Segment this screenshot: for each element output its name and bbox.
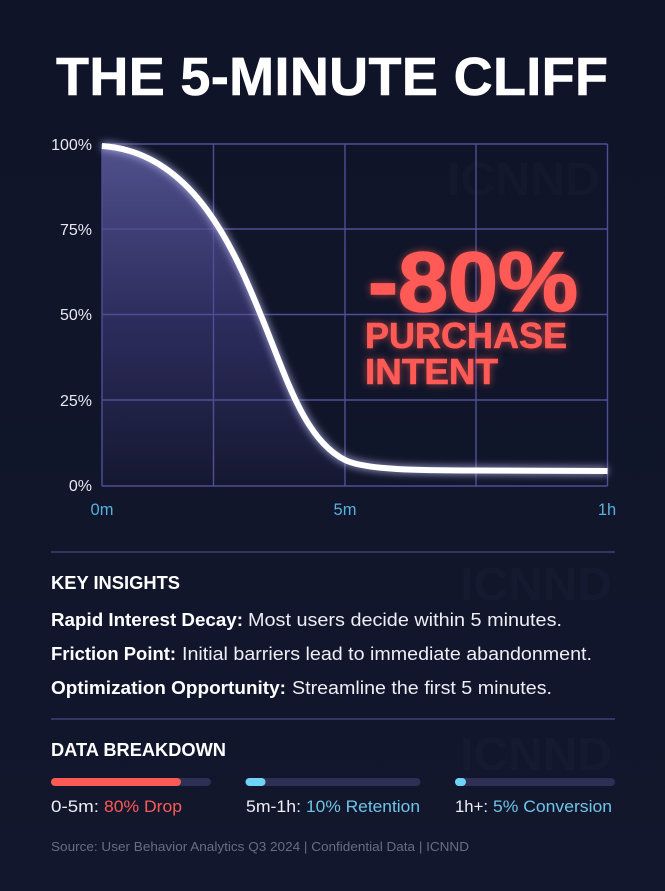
insight: rapid interest decay: [51, 610, 562, 630]
bar: 0-5m: 80% Drop: [104, 797, 182, 816]
watermark: insights: ICNND: [460, 558, 612, 610]
callout: -80% purchase intent: PURCHASE: [365, 315, 567, 356]
title: THE 5-MINUTE CLIFF: [56, 47, 608, 107]
x axis labels: 5m: [334, 501, 356, 519]
insight: optimization opportunity: [51, 678, 552, 698]
bar: 1h+: 5% Conversion: [493, 797, 612, 816]
watermark: chart: ICNND: [447, 153, 600, 205]
insight: rapid interest decay: Most users decide within 5 minutes.: [248, 610, 562, 630]
bar: 5m-1h: [246, 778, 420, 816]
insight: friction point: Initial barriers lead to immediate abandonment.: [182, 644, 592, 664]
callout: -80% purchase intent: INTENT: [365, 351, 498, 392]
insight: rapid interest decay: Rapid Interest Decay:: [51, 610, 243, 630]
y axis labels: 100%: [51, 137, 92, 154]
panel: data breakdown: [51, 740, 615, 816]
y axis labels: 50%: [60, 307, 92, 324]
bar: 1h+: 1h+:: [455, 797, 488, 816]
bar: 1h+: [455, 778, 615, 816]
curve line: [102, 146, 608, 471]
insight: friction point: Friction Point:: [51, 644, 176, 664]
callout: -80% purchase intent: [365, 235, 578, 392]
bar: 0-5m: 0-5m:: [51, 797, 99, 816]
x axis labels: 0m: [91, 501, 113, 519]
bar: 5m-1h: 5m-1h:: [246, 797, 301, 816]
callout: -80% purchase intent: -80%: [368, 235, 578, 329]
callout: -80% purchase intent: PURCHASE: [365, 315, 567, 356]
y axis labels: 25%: [60, 393, 92, 410]
callout: -80% purchase intent: -80%: [368, 235, 578, 329]
y axis labels: [51, 137, 92, 495]
chart: purchase intent decay: [51, 137, 616, 519]
area fill under curve: [102, 146, 345, 486]
watermark: data: ICNND: [460, 728, 612, 780]
x axis labels: [91, 501, 616, 519]
x axis labels: 1h: [598, 501, 616, 519]
bar: 5m-1h: 10% Retention: [306, 797, 420, 816]
insight: optimization opportunity: Streamline the first 5 minutes.: [292, 678, 552, 698]
heading: key insights: KEY INSIGHTS: [51, 573, 180, 593]
y axis labels: 75%: [60, 222, 92, 239]
insight: friction point: [51, 644, 592, 664]
panel: key insights: [51, 573, 592, 698]
heading: data breakdown: DATA BREAKDOWN: [51, 740, 226, 760]
bar: 0-5m: [51, 778, 211, 816]
curve glow: [102, 146, 608, 471]
callout: -80% purchase intent: INTENT: [365, 351, 498, 392]
insight: optimization opportunity: Optimization Opportunity:: [51, 678, 286, 698]
source footer: Source: User Behavior Analytics Q3 2024 | Confidential Data | ICNND: [51, 840, 469, 854]
y axis labels: 0%: [69, 478, 92, 495]
